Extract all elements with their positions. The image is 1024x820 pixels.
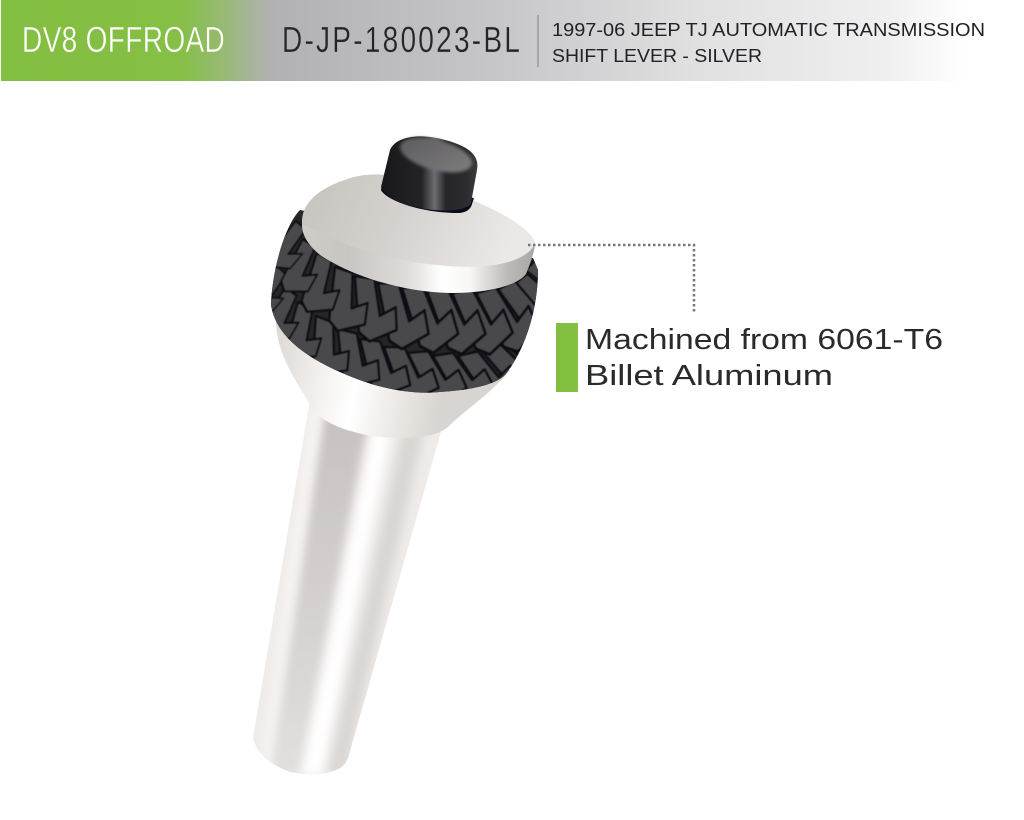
product image: shift lever [253,135,538,774]
product title: SHIFT LEVER - SILVER [552,45,762,66]
silver top disc [302,175,535,293]
tire tread grip [271,210,538,393]
product title: 1997-06 JEEP TJ AUTOMATIC TRANSMISSION [552,19,985,40]
black push button [381,131,477,213]
callout text: Billet Aluminum [585,360,833,392]
part number: D-JP-180023-BL [282,20,520,60]
green accent bar [556,323,578,392]
brand name: DV8 OFFROAD [22,20,225,60]
callout: material [528,245,943,392]
upper tread row [527,260,538,282]
lower tread row [517,298,581,363]
dotted leader line [528,245,694,313]
shaft [253,400,443,775]
lower collar [276,320,510,438]
callout text: Machined from 6061-T6 [585,324,943,356]
header banner [1,0,985,81]
